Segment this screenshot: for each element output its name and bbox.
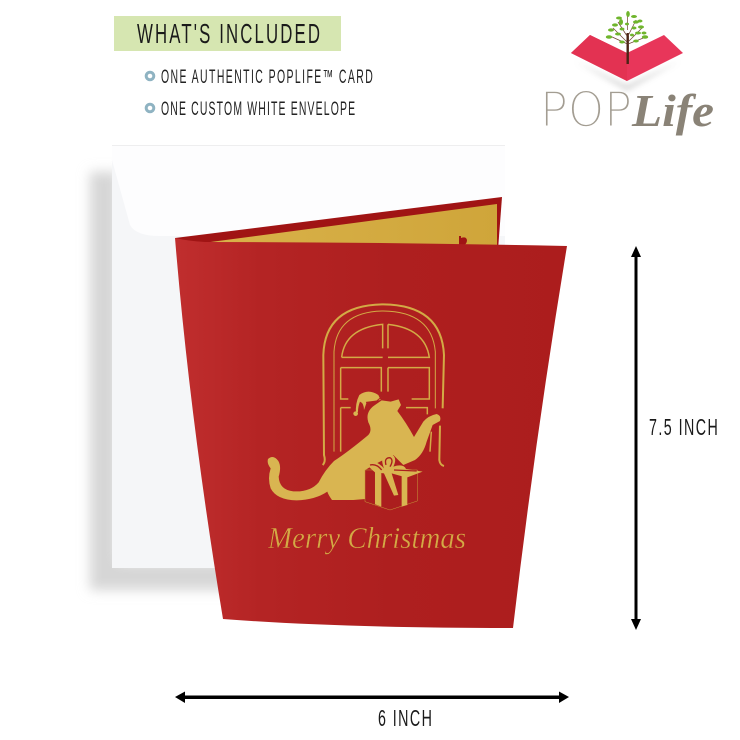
door inner arch <box>334 311 435 452</box>
label: 7.5 inch: 7.5 INCH <box>649 416 718 441</box>
card front <box>175 238 567 628</box>
greeting: Merry Christmas: Merry Christmas <box>267 520 466 555</box>
logo: PopLife <box>540 11 714 138</box>
card back panel <box>175 197 502 250</box>
door outer arch <box>323 304 444 466</box>
label: 6 inch: 6 INCH <box>378 707 432 732</box>
gift box <box>365 453 423 510</box>
list: included items <box>146 67 373 120</box>
envelope flap <box>112 146 505 236</box>
list: included items: ONE CUSTOM WHITE ENVELOPE <box>161 99 355 120</box>
logo: PopLife: Life <box>631 86 714 136</box>
window panes <box>341 324 431 452</box>
arrow: width dimension <box>175 692 569 703</box>
logo: PopLife: POP <box>540 83 632 138</box>
heading: what's included: WHAT'S INCLUDED <box>137 18 320 49</box>
envelope shadow <box>90 172 320 590</box>
list: included items: ONE AUTHENTIC POPLIFE™ CARD <box>161 67 373 88</box>
cat santa hat <box>356 392 381 414</box>
envelope <box>112 145 505 568</box>
arrow: height dimension <box>631 246 641 630</box>
cat silhouette <box>268 392 440 500</box>
door illustration <box>323 304 444 466</box>
